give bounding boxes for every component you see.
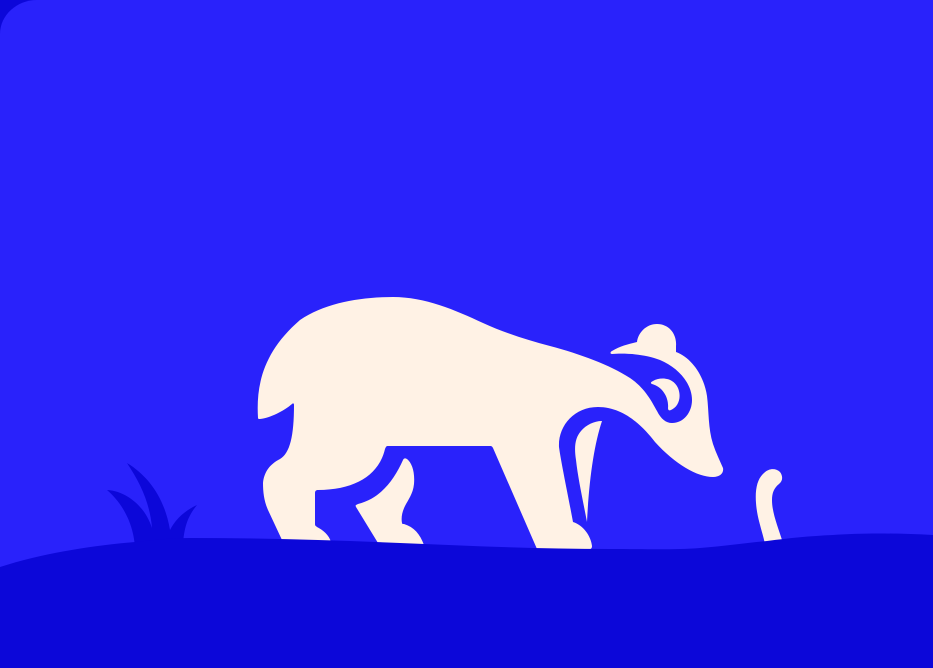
badger rear far leg (356, 458, 424, 545)
badger front far leg (575, 421, 602, 522)
ground hill (0, 534, 933, 668)
icon: tail of a hidden animal (756, 469, 783, 544)
badger (258, 297, 723, 549)
badger ear crescent (651, 379, 680, 410)
badger body and head (258, 297, 723, 549)
icon: grass tuft (107, 463, 197, 547)
